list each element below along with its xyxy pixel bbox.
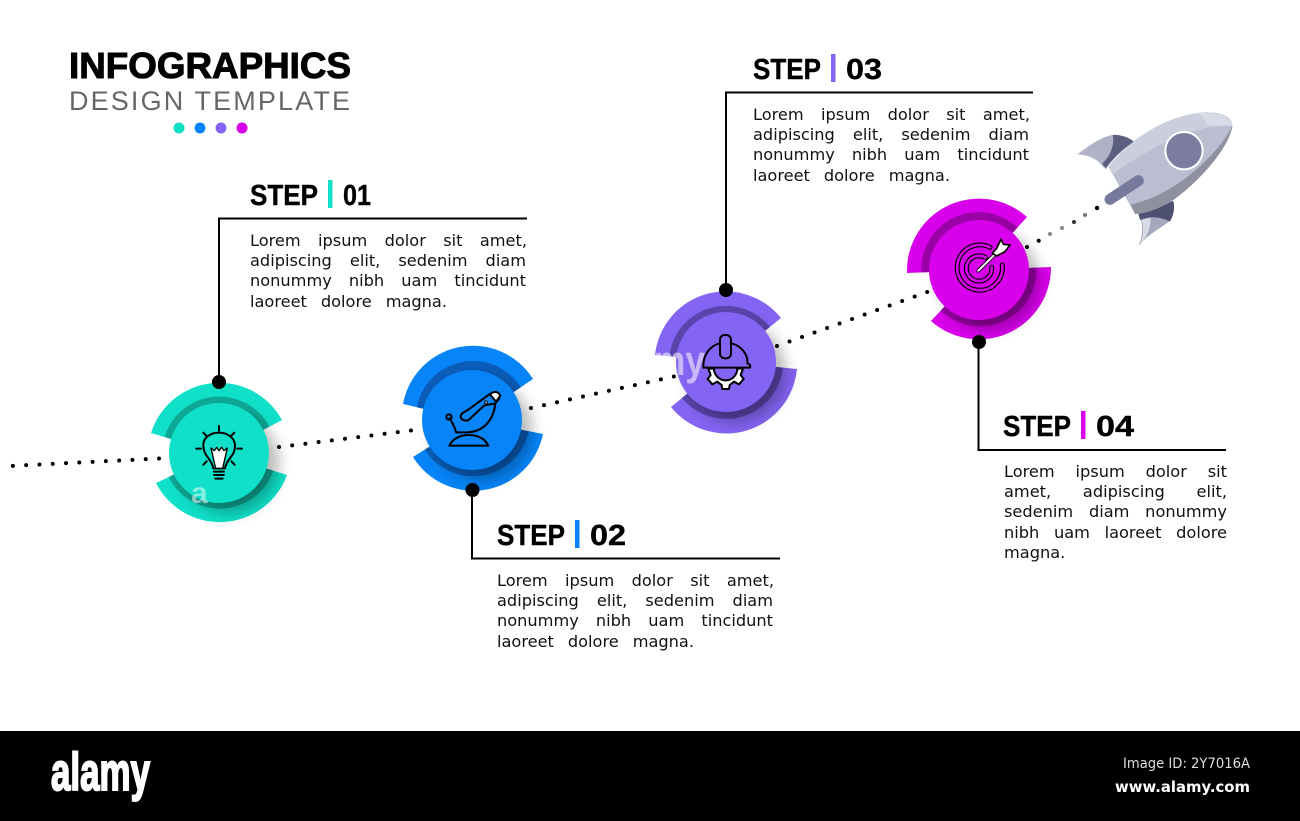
text 02: nonummy nibh uam tincidunt xyxy=(497,611,773,630)
icon: helmet and gear xyxy=(703,335,750,389)
text 02 xyxy=(497,571,777,655)
panel: step 04 xyxy=(907,199,1232,566)
icon: microscope xyxy=(446,392,500,446)
text 03: Lorem ipsum dolor sit amet, xyxy=(753,105,1030,124)
text 01: adipiscing elit, sedenim diam xyxy=(250,251,526,270)
dot 04 xyxy=(972,335,986,349)
dot 01 xyxy=(212,375,226,389)
text 02: laoreet dolore magna. xyxy=(497,632,694,651)
icon: rocket xyxy=(1077,112,1232,247)
panel: step 01 xyxy=(151,180,530,522)
icon: target and dart xyxy=(957,239,1010,290)
text 03 xyxy=(753,105,1033,189)
text 04: Lorem ipsum dolor sit xyxy=(1004,462,1227,481)
text 04 xyxy=(1004,462,1232,566)
text 03: laoreet dolore magna. xyxy=(753,166,950,185)
colour dots xyxy=(174,122,248,134)
text 04: amet, adipiscing elit, xyxy=(1004,482,1227,501)
text 04: nibh uam laoreet dolore xyxy=(1004,523,1227,542)
text 03: nonummy nibh uam tincidunt xyxy=(753,145,1029,164)
icon: light bulb xyxy=(196,426,242,479)
panel: step 02 xyxy=(403,346,780,655)
circle badge 01: a xyxy=(191,477,208,510)
website: www.alamy.com xyxy=(1115,778,1250,796)
connector 04 xyxy=(978,341,1226,450)
heading 04: STEP xyxy=(1003,411,1071,443)
connector 03 xyxy=(726,92,1033,290)
connector 01 xyxy=(219,218,527,382)
text 01: laoreet dolore magna. xyxy=(250,292,447,311)
text 01 xyxy=(250,231,530,315)
text 04: magna. xyxy=(1004,543,1065,562)
circle badge 03 xyxy=(654,291,797,433)
heading 02 xyxy=(497,520,626,552)
text 03: adipiscing elit, sedenim diam xyxy=(753,125,1029,144)
circle badge 01 xyxy=(151,383,287,522)
circle badge 03: my xyxy=(654,337,706,384)
subtitle: DESIGN TEMPLATE xyxy=(69,86,350,116)
watermark logo: alamy xyxy=(51,743,150,802)
circle badge 02 xyxy=(403,346,543,491)
heading 04: 04 xyxy=(1096,411,1134,443)
title block xyxy=(69,45,351,134)
heading 01 xyxy=(250,180,371,212)
footer bar xyxy=(0,731,1300,821)
heading 03: STEP xyxy=(753,54,821,86)
heading 03: 03 xyxy=(846,54,882,86)
dot 03 xyxy=(719,283,733,297)
connector 02 xyxy=(472,490,780,558)
text 02: adipiscing elit, sedenim diam xyxy=(497,591,773,610)
heading 04 xyxy=(1003,411,1134,443)
title: INFOGRAPHICS xyxy=(69,45,351,86)
heading 01: STEP xyxy=(250,180,318,212)
heading 01: 01 xyxy=(343,180,371,212)
text 04: sedenim diam nonummy xyxy=(1004,502,1227,521)
heading 02: STEP xyxy=(497,520,565,552)
dot 02 xyxy=(466,483,480,497)
text 02: Lorem ipsum dolor sit amet, xyxy=(497,571,774,590)
circle badge 04 xyxy=(907,199,1051,339)
text 01: Lorem ipsum dolor sit amet, xyxy=(250,231,527,250)
panel: step 03 xyxy=(654,54,1033,433)
dotted flight path xyxy=(10,206,1099,466)
heading 02: 02 xyxy=(590,520,626,552)
text 01: nonummy nibh uam tincidunt xyxy=(250,271,526,290)
image id: Image ID: 2Y7016A xyxy=(1123,756,1250,772)
heading 03 xyxy=(753,54,882,86)
